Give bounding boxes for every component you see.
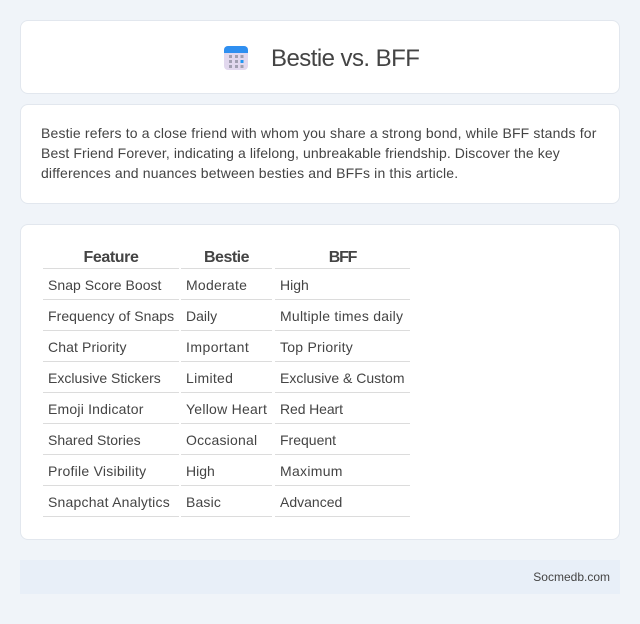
row: Snapchat Analytics: Basic — [186, 494, 221, 510]
row: Exclusive Stickers — [48, 370, 404, 386]
row: Chat Priority — [48, 339, 353, 355]
footer text: Socmedb.com — [533, 570, 610, 584]
title: Bestie vs. BFF — [271, 45, 419, 72]
row: Profile Visibility: Profile Visibility — [48, 463, 146, 479]
row: Emoji Indicator: Emoji Indicator — [48, 401, 144, 417]
row: Snapchat Analytics: Snapchat Analytics — [48, 494, 170, 510]
header: Feature: Feature — [84, 249, 138, 266]
header: BFF: BFF — [329, 249, 356, 266]
row: Snap Score Boost: High — [280, 277, 309, 293]
row: Chat Priority: Chat Priority — [48, 339, 127, 355]
text block: introduction: differences and nuances between besties and BFFs in this article. — [41, 165, 458, 181]
row: Frequency of Snaps — [48, 308, 403, 324]
row: Snapchat Analytics: Advanced — [280, 494, 342, 510]
row: Shared Stories: Occasional — [186, 432, 257, 448]
icon: calendar — [224, 46, 248, 70]
row: Snap Score Boost — [48, 277, 309, 293]
panel: introduction — [20, 104, 620, 204]
row: Profile Visibility — [48, 463, 343, 479]
row: Snap Score Boost: Moderate — [186, 277, 247, 293]
row: Snap Score Boost: Snap Score Boost — [48, 277, 162, 293]
row: Profile Visibility: High — [186, 463, 215, 479]
row: Snapchat Analytics — [48, 494, 342, 510]
row: Chat Priority: Important — [186, 339, 249, 355]
comparison table — [43, 249, 410, 517]
row: Emoji Indicator: Yellow Heart — [186, 401, 267, 417]
row: Frequency of Snaps: Frequency of Snaps — [48, 308, 174, 324]
footer bar — [20, 560, 620, 594]
row: Exclusive Stickers: Exclusive Stickers — [48, 370, 161, 386]
row: Emoji Indicator — [48, 401, 343, 417]
row: Emoji Indicator: Red Heart — [280, 401, 343, 417]
row: Chat Priority: Top Priority — [280, 339, 353, 355]
text block: introduction — [41, 125, 597, 181]
panel: comparison table card — [20, 224, 620, 540]
row: Exclusive Stickers: Limited — [186, 370, 233, 386]
row: Frequency of Snaps: Multiple times daily — [280, 308, 403, 324]
text block: introduction: Bestie refers to a close friend with whom you share a strong bond, while BFF stands for — [41, 125, 597, 141]
text block: introduction: Best Friend Forever, indicating a lifelong, unbreakable friendship. Discover the key — [41, 145, 560, 161]
row: Frequency of Snaps: Daily — [186, 308, 217, 324]
row: Shared Stories: Frequent — [280, 432, 336, 448]
row: Shared Stories: Shared Stories — [48, 432, 141, 448]
row: Profile Visibility: Maximum — [280, 463, 343, 479]
header: Bestie: Bestie — [204, 249, 249, 266]
row: Shared Stories — [48, 432, 336, 448]
row: Exclusive Stickers: Exclusive & Custom — [280, 370, 404, 386]
panel: title card — [20, 20, 620, 94]
